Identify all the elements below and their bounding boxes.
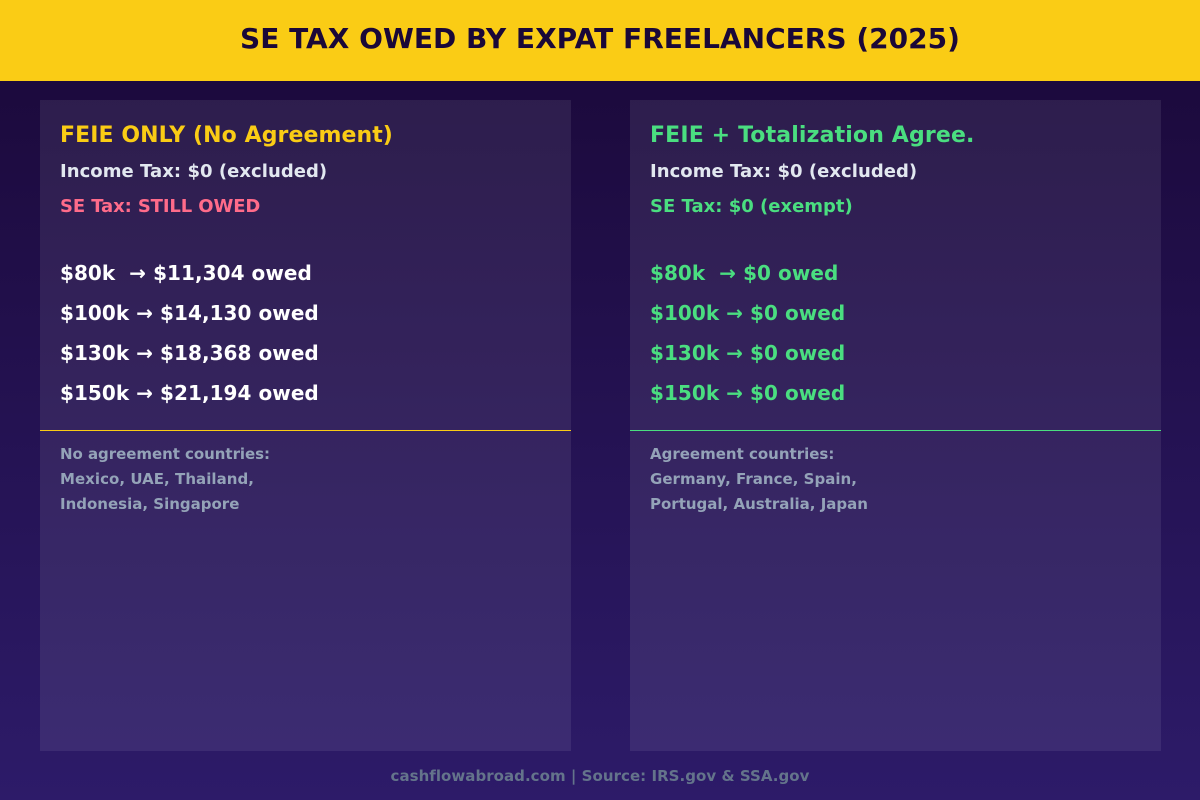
- income tax line: Income Tax: $0 (excluded): [60, 161, 327, 182]
- no agreement countries list: Mexico, UAE, Thailand,: [60, 470, 254, 488]
- tax owed rows: $80k → $11,304 owed: [60, 261, 312, 285]
- zero owed rows: $80k → $0 owed: [650, 261, 838, 285]
- tax owed rows: $100k → $14,130 owed: [60, 301, 319, 325]
- agreement countries list: [650, 445, 868, 513]
- agreement countries list: Germany, France, Spain,: [650, 470, 857, 488]
- income tax line: Income Tax: $0 (excluded): [650, 161, 917, 182]
- SE tax status: SE Tax: $0 (exempt): [650, 196, 853, 217]
- tax owed rows: $130k → $18,368 owed: [60, 341, 319, 365]
- no agreement countries list: No agreement countries:: [60, 445, 270, 463]
- title banner: [0, 0, 1200, 81]
- panel heading: FEIE only: FEIE ONLY (No Agreement): [60, 123, 393, 148]
- zero owed rows: $130k → $0 owed: [650, 341, 845, 365]
- zero owed rows: $100k → $0 owed: [650, 301, 845, 325]
- agreement countries list: Agreement countries:: [650, 445, 834, 463]
- no agreement countries list: Indonesia, Singapore: [60, 495, 239, 513]
- SE tax status: SE Tax: STILL OWED: [60, 196, 260, 217]
- zero owed rows: [650, 261, 845, 405]
- panel: FEIE only, no agreement: [40, 100, 571, 751]
- zero owed rows: $150k → $0 owed: [650, 381, 845, 405]
- footer source line: cashflowabroad.com | Source: IRS.gov & SSA.gov: [391, 767, 809, 785]
- title text: SE TAX OWED BY EXPAT FREELANCERS (2025): [240, 22, 960, 55]
- panel: FEIE plus totalization agreement: [630, 100, 1161, 751]
- panel heading: FEIE plus totalization: FEIE + Totalization Agree.: [650, 123, 975, 148]
- tax owed rows: [60, 261, 319, 405]
- tax owed rows: $150k → $21,194 owed: [60, 381, 319, 405]
- no agreement countries list: [60, 445, 270, 513]
- agreement countries list: Portugal, Australia, Japan: [650, 495, 868, 513]
